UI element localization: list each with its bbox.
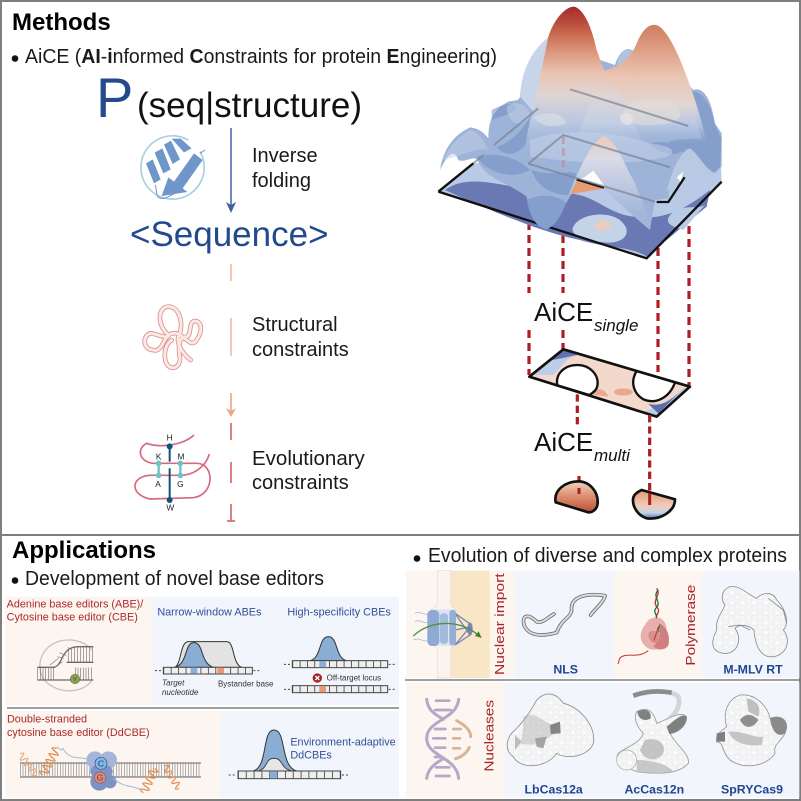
label: adenine and cytosine base editors — [7, 598, 144, 624]
label: polymerase: Polymerase — [683, 585, 698, 666]
bullet: base editors: Development of novel base editors — [25, 568, 324, 590]
label: nuclear import: Nuclear import — [492, 573, 507, 675]
label: evolutionary constraints: Evolutionary — [252, 447, 366, 470]
formula: P(seq|structure): P — [96, 66, 133, 129]
panel: AiCE multi fragments — [555, 481, 675, 519]
divider: protein rows — [405, 679, 800, 681]
landscape dark patches — [477, 92, 722, 229]
icon: evolutionary couplings: G — [177, 479, 184, 489]
formula: P(seq|structure) — [96, 66, 362, 129]
bullet: AiCE definition: AiCE (AI-informed Constraints for protein Engineering) — [25, 46, 497, 68]
bullet: diverse proteins: Evolution of diverse and complex proteins — [428, 545, 787, 567]
panel: DdCBE — [5, 711, 399, 798]
icon: evolutionary couplings: W — [166, 503, 174, 513]
label: evolutionary constraints — [252, 447, 366, 494]
label: AiCE single: single — [594, 316, 638, 335]
label: adenine and cytosine base editors: Cytosine base editor (CBE) — [7, 612, 138, 624]
landscape main peak — [523, 7, 647, 153]
label: inverse folding: folding — [252, 170, 311, 192]
label: AiCE single: AiCE — [534, 297, 593, 327]
heading: Methods: Methods — [12, 9, 111, 36]
formula: P(seq|structure): (seq|structure) — [137, 86, 362, 125]
divider: base editor rows — [7, 707, 399, 709]
label: inverse folding: Inverse — [252, 145, 318, 167]
label: target nucleotide: Target — [162, 678, 185, 687]
panel: nucleases — [406, 683, 799, 798]
label: adenine and cytosine base editors: Adenine base editors (ABE)/ — [7, 598, 144, 610]
label: environment-adaptive DdCBEs — [290, 736, 396, 761]
landscape pale bands — [443, 50, 637, 160]
icon: evolutionary couplings: K — [156, 451, 162, 461]
icon: M-MLV RT structure — [713, 586, 787, 657]
label: double-stranded cytosine base editor — [7, 713, 150, 739]
label: evolutionary constraints: constraints — [252, 472, 349, 494]
label: structural constraints: constraints — [252, 339, 349, 361]
panel: nuclear import — [406, 571, 614, 678]
label: nucleases: Nucleases — [481, 700, 496, 772]
landscape hole and exposed patch — [571, 171, 683, 194]
icon: protein fold — [141, 136, 205, 199]
label: SpRYCas9: SpRYCas9 — [721, 782, 783, 796]
label: AiCE multi: AiCE — [534, 427, 593, 457]
landscape body — [440, 33, 722, 230]
heading: Applications: Applications — [12, 537, 156, 564]
landscape reflected frame lines — [473, 89, 688, 202]
icon: LbCas12a structure — [507, 694, 594, 766]
label: structural constraints: Structural — [252, 314, 338, 336]
panel: DdCBE: G — [97, 773, 103, 783]
landscape mid bands — [530, 99, 680, 163]
icon: AcCas12n structure — [617, 691, 688, 774]
label: AiCE single — [534, 297, 638, 335]
chart: fitness landscape — [438, 7, 722, 258]
label: environment-adaptive DdCBEs: DdCBEs — [290, 749, 332, 761]
label: high-specificity CBEs: High-specificity CBEs — [287, 607, 391, 619]
label: NLS: NLS — [553, 663, 578, 677]
icon: nuclear pore — [413, 571, 482, 678]
icon: base editor — [37, 640, 93, 691]
panel: ABE and CBE: Y — [73, 677, 78, 684]
label: structural constraints — [252, 314, 349, 361]
panel: DdCBE: C — [98, 758, 104, 768]
icon: evolutionary couplings — [135, 433, 210, 513]
icon: NLS peptide — [524, 595, 605, 635]
landscape front peak — [568, 136, 650, 230]
arrow: constraint path — [226, 264, 236, 521]
icon: SpRYCas9 structure — [716, 695, 787, 766]
chart: high specificity curve — [284, 637, 395, 693]
label: AiCE multi: multi — [594, 446, 631, 465]
icon: evolutionary couplings: H — [167, 433, 173, 443]
icon: DNA helix — [427, 699, 471, 778]
label: target nucleotide — [162, 678, 199, 697]
chart: narrow window curve — [155, 642, 260, 674]
icon: evolutionary couplings: M — [178, 451, 185, 461]
icon: tangled chain — [145, 307, 201, 368]
label: environment-adaptive DdCBEs: Environment-adaptive — [290, 736, 396, 748]
label: AcCas12n: AcCas12n — [625, 782, 684, 796]
chart: environment-adaptive curve — [229, 730, 349, 779]
label: double-stranded cytosine base editor: Double-stranded — [7, 713, 87, 725]
landscape pale shoulder — [520, 37, 548, 112]
icon: evolutionary couplings: A — [155, 479, 161, 489]
projection lines: lower — [577, 394, 650, 492]
label: double-stranded cytosine base editor: cytosine base editor (DdCBE) — [7, 727, 150, 739]
icon: polymerase — [618, 588, 669, 664]
landscape second peak — [577, 25, 707, 143]
label: M-MLV RT: M-MLV RT — [723, 663, 783, 677]
arrow: inverse folding — [226, 128, 236, 213]
icon: DdCBE on DNA — [17, 746, 201, 794]
label: LbCas12a: LbCas12a — [525, 782, 583, 796]
heading: sequence: <Sequence> — [130, 215, 329, 254]
panel: ABE and CBE — [5, 597, 399, 705]
label: AiCE multi — [534, 427, 631, 465]
label: narrow-window ABEs: Narrow-window ABEs — [157, 607, 262, 619]
projection lines: upper — [529, 200, 689, 385]
label: bystander base: Bystander base — [218, 680, 274, 689]
label: off-target locus: Off-target locus — [327, 673, 381, 682]
panel: AiCE single slice — [529, 349, 690, 417]
landscape base plane — [438, 147, 722, 258]
label: inverse folding — [252, 145, 318, 192]
panel: polymerase — [614, 571, 799, 678]
label: target nucleotide: nucleotide — [162, 688, 199, 697]
landscape right lump — [667, 148, 718, 192]
